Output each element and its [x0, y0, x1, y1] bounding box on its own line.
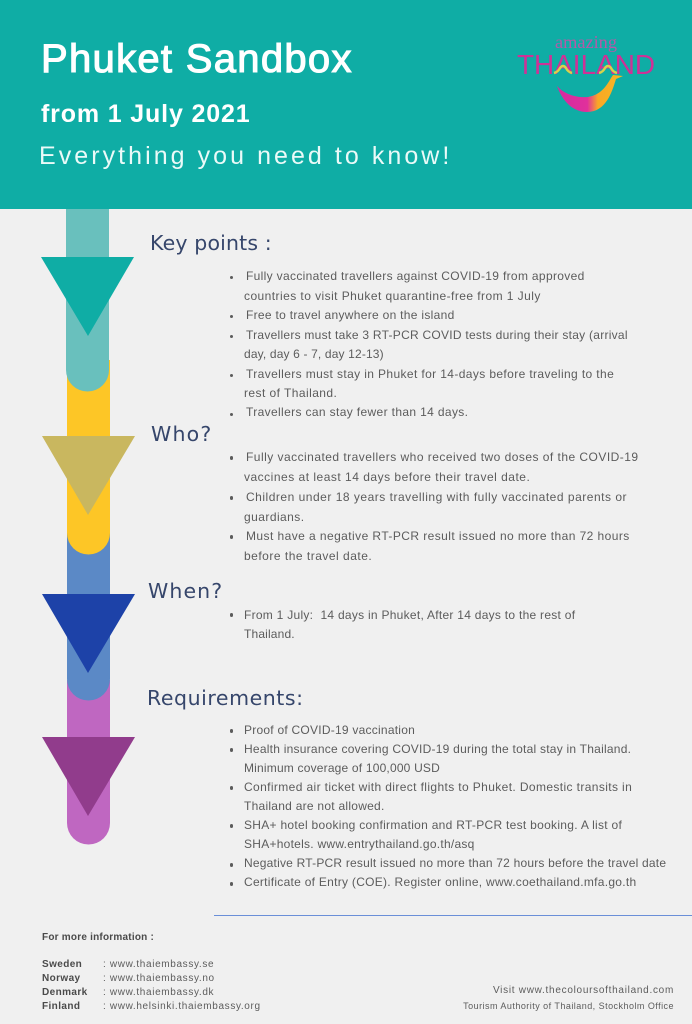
text block: requirements: Thailand are not allowed.: [244, 799, 385, 813]
footer: embassy contacts: : www.helsinki.thaiembassy.org: [103, 1001, 261, 1012]
footer: tourism authority: [463, 985, 674, 1011]
teal triangle: [41, 257, 134, 336]
teal bar: [66, 209, 109, 392]
text block: who: Children under 18 years travelling with fully vaccinated parents or: [246, 490, 627, 504]
text block: requirements: [230, 723, 666, 889]
logo: amazing Thailand: amazing: [555, 32, 617, 52]
heading: requirements: Requirements:: [147, 686, 304, 710]
text block: when: Thailand.: [244, 627, 295, 641]
heading: when: When?: [148, 579, 223, 603]
heading: who: Who?: [151, 422, 212, 446]
text block: key points: day, day 6 - 7, day 12-13): [244, 347, 384, 361]
heading: key points: Key points :: [150, 231, 272, 255]
text block: who: [230, 450, 639, 563]
footer: embassy contacts: : www.thaiembassy.no: [103, 973, 215, 984]
footer: embassy contacts: Sweden: [42, 959, 82, 970]
text block: requirements: Negative RT-PCR result issued no more than 72 hours before the travel date: [244, 856, 666, 870]
footer: embassy contacts: For more information :: [42, 932, 154, 943]
text block: requirements: Minimum coverage of 100,000 USD: [244, 761, 440, 775]
text block: requirements: SHA+ hotel booking confirmation and RT-PCR test booking. A list of: [244, 818, 622, 832]
text block: requirements: Certificate of Entry (COE). Register online, www.coethailand.mfa.go.th: [244, 875, 636, 889]
text block: key points: countries to visit Phuket quarantine-free from 1 July: [244, 289, 541, 303]
footer: embassy contacts: [42, 932, 261, 1012]
footer: embassy contacts: : www.thaiembassy.se: [103, 959, 214, 970]
logo: amazing Thailand: [517, 32, 655, 112]
footer: tourism authority: Visit www.thecoloursofthailand.com: [493, 985, 674, 996]
header band: [0, 0, 692, 209]
text block: who: Must have a negative RT-PCR result issued no more than 72 hours: [246, 529, 630, 543]
footer: embassy contacts: Finland: [42, 1001, 80, 1012]
subtitle: date: from 1 July 2021: [41, 100, 251, 128]
text block: who: Fully vaccinated travellers who received two doses of the COVID-19: [246, 450, 639, 464]
navy triangle: [42, 594, 135, 673]
footer: tourism authority: Tourism Authority of Thailand, Stockholm Office: [463, 1001, 674, 1011]
text block: key points: Travellers can stay fewer than 14 days.: [246, 405, 468, 419]
text block: who: before the travel date.: [244, 549, 372, 563]
text block: who: vaccines at least 14 days before their travel date.: [244, 470, 530, 484]
text block: key points: Free to travel anywhere on the island: [246, 308, 455, 322]
purple bar: [67, 680, 110, 844]
text block: when: [230, 608, 576, 641]
yellow bar: [67, 360, 110, 554]
text block: key points: Travellers must take 3 RT-PCR COVID tests during their stay (arrival: [246, 328, 628, 342]
text block: requirements: Proof of COVID-19 vaccination: [244, 723, 415, 737]
logo: amazing Thailand: THAILAND: [517, 49, 655, 80]
text block: key points: Fully vaccinated travellers against COVID-19 from approved: [246, 269, 585, 283]
footer: embassy contacts: Norway: [42, 973, 81, 984]
footer: embassy contacts: Denmark: [42, 987, 88, 998]
text block: key points: rest of Thailand.: [244, 386, 337, 400]
text block: who: guardians.: [244, 510, 305, 524]
text block: key points: Travellers must stay in Phuket for 14-days before traveling to the: [246, 367, 614, 381]
text block: when: From 1 July: 14 days in Phuket, After 14 days to the rest of: [244, 608, 575, 622]
text block: requirements: SHA+hotels. www.entrythailand.go.th/asq: [244, 837, 475, 851]
text block: requirements: Confirmed air ticket with direct flights to Phuket. Domestic transits in: [244, 780, 632, 794]
arrows column: [41, 209, 135, 844]
olive triangle: [42, 436, 135, 515]
blue bar: [67, 520, 110, 701]
text block: requirements: Health insurance covering COVID-19 during the total stay in Thailand.: [244, 742, 631, 756]
tagline: Everything you need to know!: [39, 142, 452, 170]
text block: key points: [230, 269, 628, 419]
purple triangle: [42, 737, 135, 816]
footer: embassy contacts: : www.thaiembassy.dk: [103, 987, 214, 998]
title: Phuket Sandbox: [41, 37, 353, 81]
